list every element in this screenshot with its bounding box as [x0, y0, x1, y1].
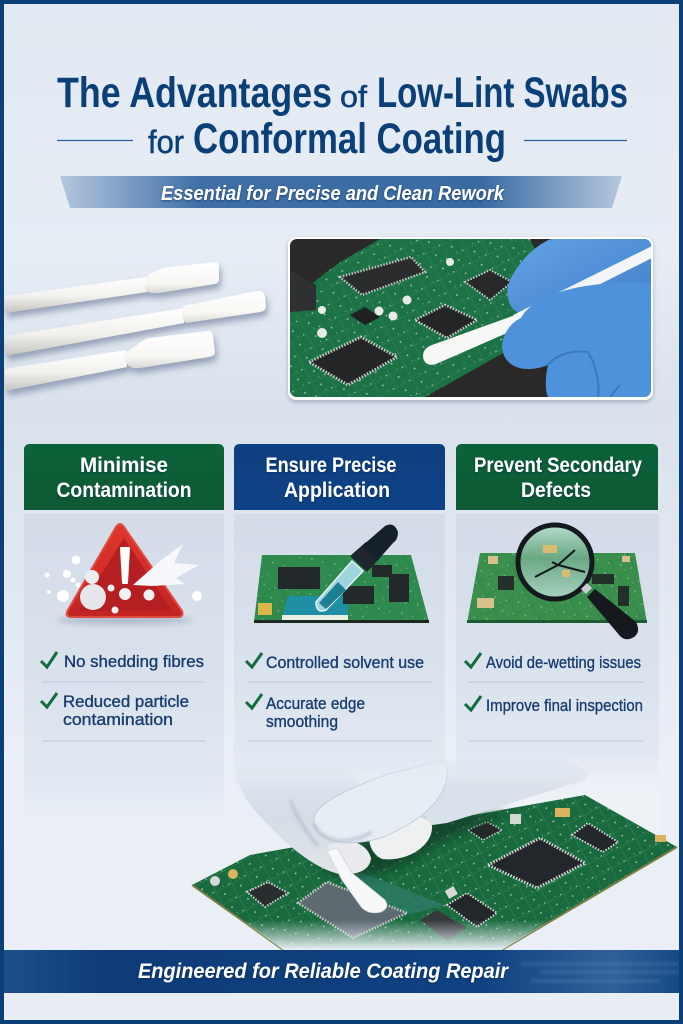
swab 1: [5, 262, 219, 313]
subtitle banner: [60, 176, 622, 208]
lower glove hand: [502, 283, 651, 397]
card heading: Minimise: [80, 454, 168, 477]
card body: [24, 514, 224, 844]
magnifier handle: [581, 583, 592, 594]
title: [57, 69, 628, 163]
swabs product photo: [5, 262, 266, 391]
chip upper right: [572, 823, 618, 852]
card 2: ensure precise application: [234, 444, 445, 814]
circuit board: [192, 795, 677, 951]
card heading: Ensure Precise: [266, 454, 396, 477]
title line 1: of: [340, 79, 367, 114]
card heading: Defects: [521, 479, 591, 502]
card body: [456, 514, 659, 814]
small chip: [350, 307, 380, 325]
board parts: [498, 574, 629, 606]
card heading: [456, 444, 658, 510]
footer band: [4, 950, 679, 993]
circuit board: [290, 239, 560, 397]
icon: warning triangle with particles: [44, 524, 202, 625]
lens crack: [535, 550, 585, 577]
card 1: minimise contamination: [24, 444, 224, 844]
DIP chip: [340, 257, 425, 295]
coated area: [282, 596, 348, 619]
left finger: [238, 779, 360, 874]
large chip: [309, 337, 397, 385]
board: [254, 555, 429, 622]
list item: avoid de-wetting issues: Avoid de-wetting issues: [486, 653, 641, 672]
list item: controlled solvent use: Controlled solvent use: [266, 653, 424, 672]
coated area: [345, 872, 445, 915]
card heading: [234, 444, 445, 510]
dropper: [316, 524, 398, 611]
title line 2: Conformal Coating: [193, 115, 506, 163]
subtitle banner: Essential for Precise and Clean Rework: [161, 183, 505, 205]
swab stick and tip: [423, 246, 652, 365]
big finger: [314, 760, 447, 843]
back of hand: [426, 767, 590, 826]
chip left: [247, 882, 288, 907]
chip right: [415, 305, 477, 338]
list item: no shedding fibres: No shedding fibres: [64, 652, 204, 671]
chip bottom: [420, 910, 467, 940]
title line 1: [57, 69, 628, 117]
lower fade over board: [192, 795, 677, 951]
footer band: Engineered for Reliable Coating Repair: [138, 960, 510, 983]
swab in glove: [327, 848, 387, 913]
title line 2: [57, 115, 627, 163]
icon: dropper over circuit board: [254, 524, 429, 623]
chip lower right: [447, 893, 497, 927]
connector: [290, 270, 316, 312]
list item: reduced particle contamination: [41, 692, 189, 729]
title line 2: for: [148, 124, 184, 160]
board components: [228, 808, 666, 879]
list item: accurate edge smoothing: [246, 694, 365, 731]
card heading: Application: [284, 479, 390, 502]
finger creases: [548, 352, 620, 397]
middle finger: [369, 816, 432, 859]
light backdrop: [445, 755, 659, 842]
shadow under glove: [320, 812, 510, 876]
dark background: [290, 239, 651, 397]
upper glove finger: [507, 239, 651, 313]
rework photo: [288, 237, 653, 400]
list item: reduced particle contamination: Reduced particle: [63, 692, 189, 711]
components: [317, 258, 454, 338]
board chips: [278, 565, 409, 604]
magnifier lens: [518, 525, 592, 599]
card heading: Contamination: [56, 479, 192, 502]
swab 3: [5, 331, 215, 391]
finger creases: [290, 800, 372, 846]
bottom scene: gloved hand cleaning circuit board: [192, 755, 677, 951]
list item: accurate edge smoothing: smoothing: [266, 712, 338, 731]
swab 2: [5, 291, 266, 356]
icon: magnifier over circuit board: [467, 525, 647, 639]
list item: improve final inspection: Improve final inspection: [486, 696, 643, 715]
large chip: [488, 838, 585, 888]
card body: [234, 514, 445, 814]
lower finger: [328, 841, 371, 874]
list item: accurate edge smoothing: Accurate edge: [266, 694, 365, 713]
board: [467, 553, 647, 623]
card heading: [24, 444, 224, 510]
chip upper right: [465, 270, 512, 300]
lens detail: [543, 545, 570, 577]
card heading: Prevent Secondary: [474, 454, 642, 477]
title line 1: The Advantages: [57, 69, 332, 117]
coated chip: [298, 882, 407, 938]
white glove: [237, 758, 590, 875]
chip top: [468, 822, 502, 840]
card 3: prevent secondary defects: [456, 444, 659, 814]
list item: reduced particle contamination: contamination: [63, 710, 173, 729]
